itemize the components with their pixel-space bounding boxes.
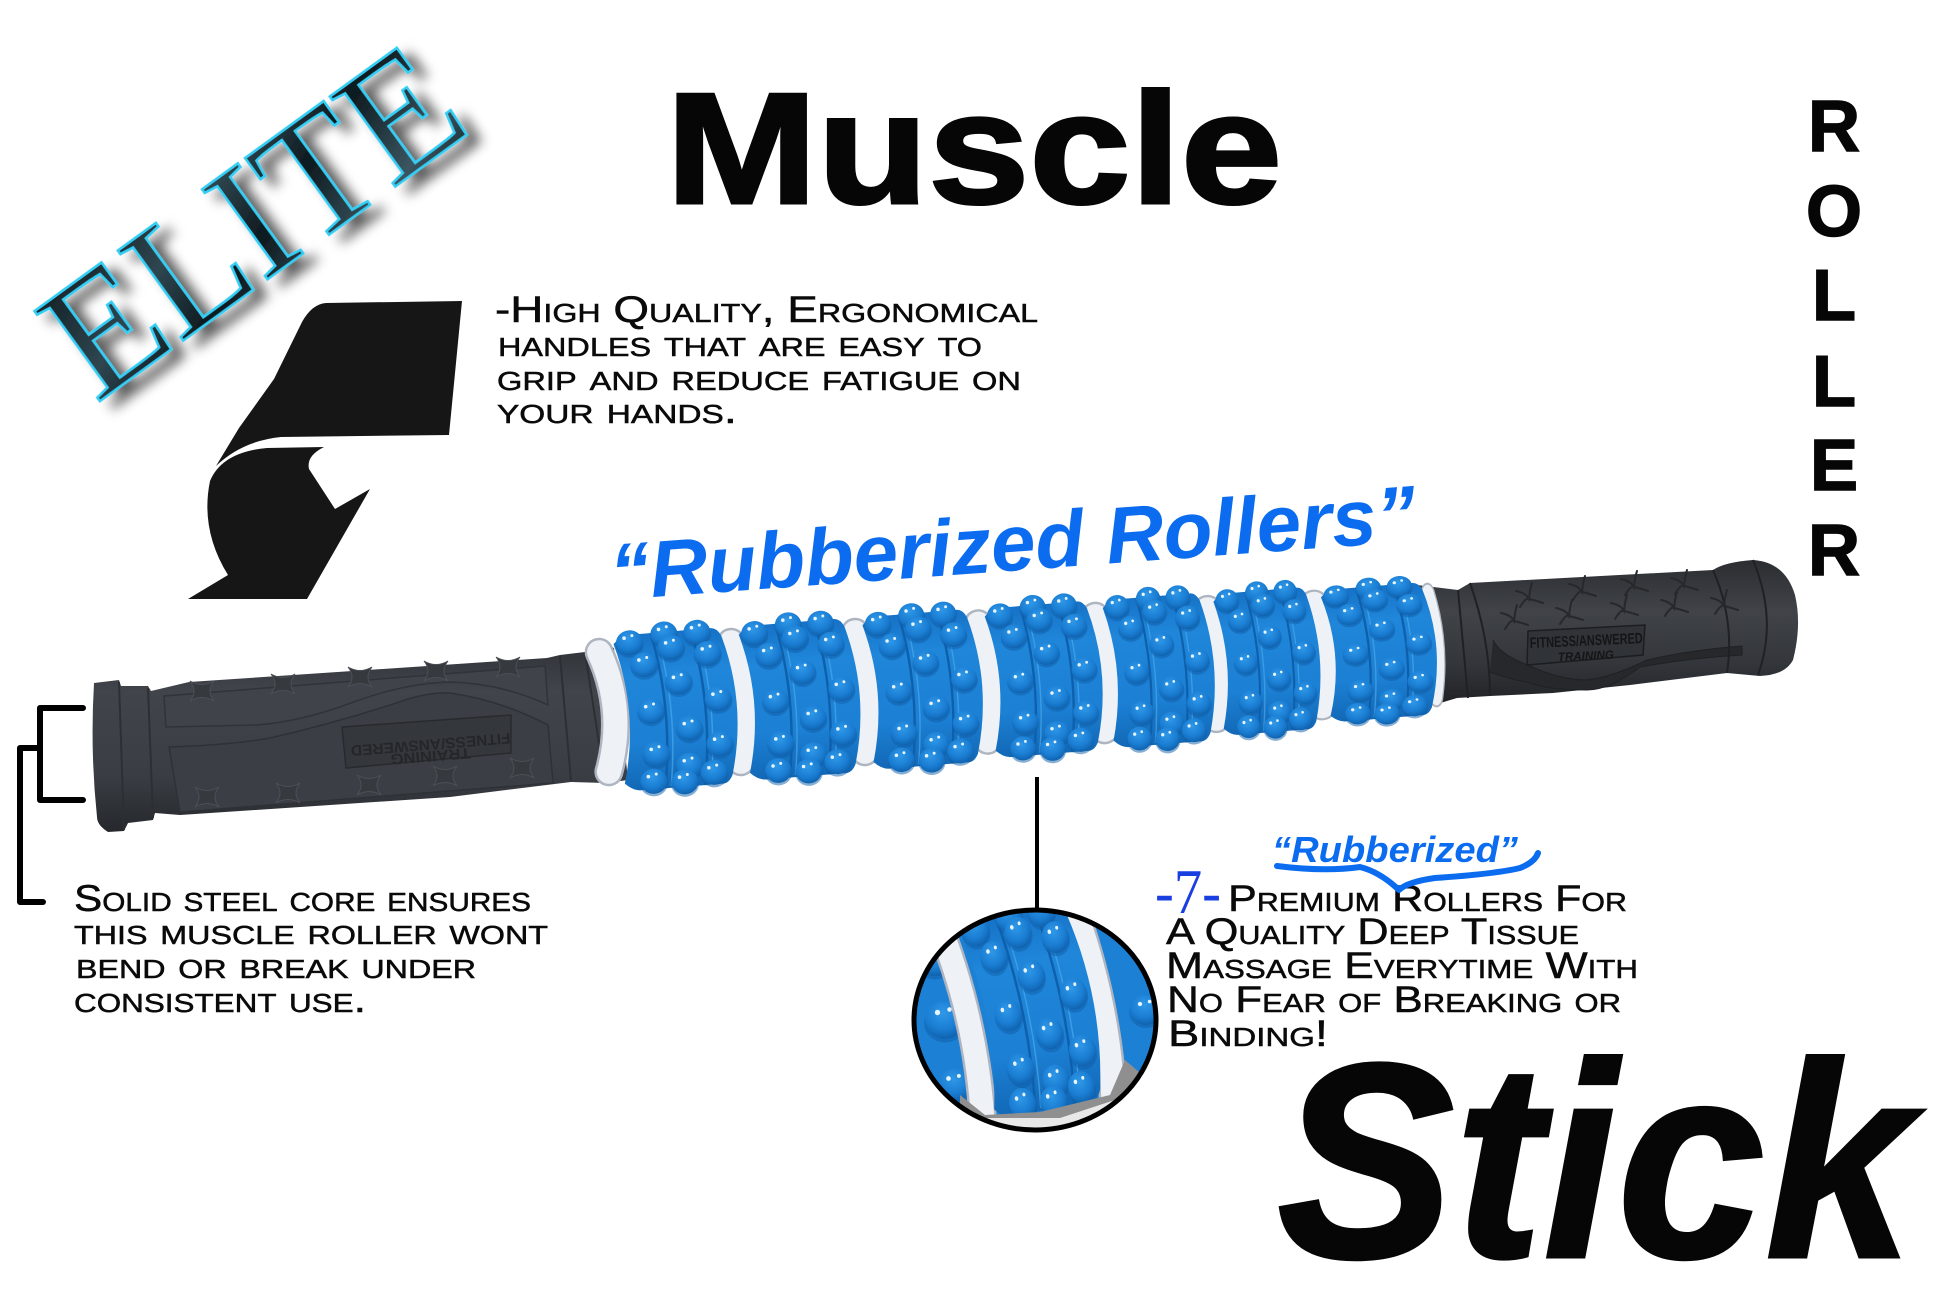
text block: handles: your hands.	[497, 390, 737, 431]
label: embossed brand, left handle: TRAINING	[390, 744, 471, 767]
left handle	[93, 644, 628, 832]
white rings	[599, 594, 1442, 772]
title: Roller (vertical): L	[1812, 256, 1856, 336]
text block: premium rollers	[1166, 878, 1638, 1054]
text block: steel core: bend or break under	[76, 945, 476, 986]
text block: premium rollers: Premium Rollers For	[1228, 878, 1627, 919]
bracket: steel core callout	[20, 708, 83, 902]
product: muscle roller stick	[93, 560, 1798, 832]
badge: Elite: ELITE	[7, 7, 496, 434]
text block: premium rollers: Massage Everytime With	[1166, 945, 1638, 986]
text block: handles: -High Quality, Ergonomical	[495, 289, 1038, 330]
grip x marks, left	[190, 657, 534, 807]
text block: steel core: consistent use.	[74, 979, 366, 1020]
text block: handles: handles that are easy to	[498, 323, 982, 364]
label: embossed brand, right handle: FITNESS/ANSWERED	[1529, 630, 1643, 652]
text block: premium rollers: No Fear of Breaking or	[1167, 979, 1621, 1020]
text block: steel core	[74, 878, 548, 1020]
title: Roller (vertical): O	[1806, 172, 1862, 252]
label: embossed brand, left handle	[342, 715, 511, 768]
text block: steel core: this muscle roller wont	[74, 911, 548, 952]
icon: brand logo	[188, 301, 462, 599]
text block: handles	[495, 289, 1038, 431]
inset: roller close-up	[912, 908, 1158, 1132]
heading: Rubberized Rollers: “Rubberized Rollers”	[607, 469, 1419, 617]
connector line to inset	[1035, 777, 1039, 912]
title: Roller (vertical)	[1806, 87, 1862, 591]
title: Roller (vertical): E	[1810, 426, 1858, 506]
grip stars, right	[1501, 570, 1738, 629]
number: -7-: -7-	[1155, 856, 1221, 927]
label: embossed brand, left handle: FITNESS/ANSWERED	[350, 729, 511, 759]
text block: handles: grip and reduce fatigue on	[497, 357, 1021, 398]
title: Muscle: Muscle	[666, 61, 1282, 237]
title: Roller (vertical): R	[1808, 87, 1860, 167]
annotation: Rubberized: “Rubberized”	[1272, 829, 1518, 870]
text block: steel core: Solid steel core ensures	[74, 878, 531, 919]
right handle	[1417, 560, 1798, 707]
text block: premium rollers: Binding!	[1168, 1013, 1328, 1054]
underline swoosh	[1277, 853, 1538, 890]
title: Roller (vertical): L	[1812, 342, 1856, 422]
text block: premium rollers: A Quality Deep Tissue	[1166, 911, 1579, 952]
blue rollers	[612, 573, 1442, 802]
title: Roller (vertical): R	[1808, 511, 1860, 591]
label: embossed brand, right handle	[1527, 625, 1645, 665]
label: embossed brand, right handle: TRAINING	[1558, 648, 1614, 664]
